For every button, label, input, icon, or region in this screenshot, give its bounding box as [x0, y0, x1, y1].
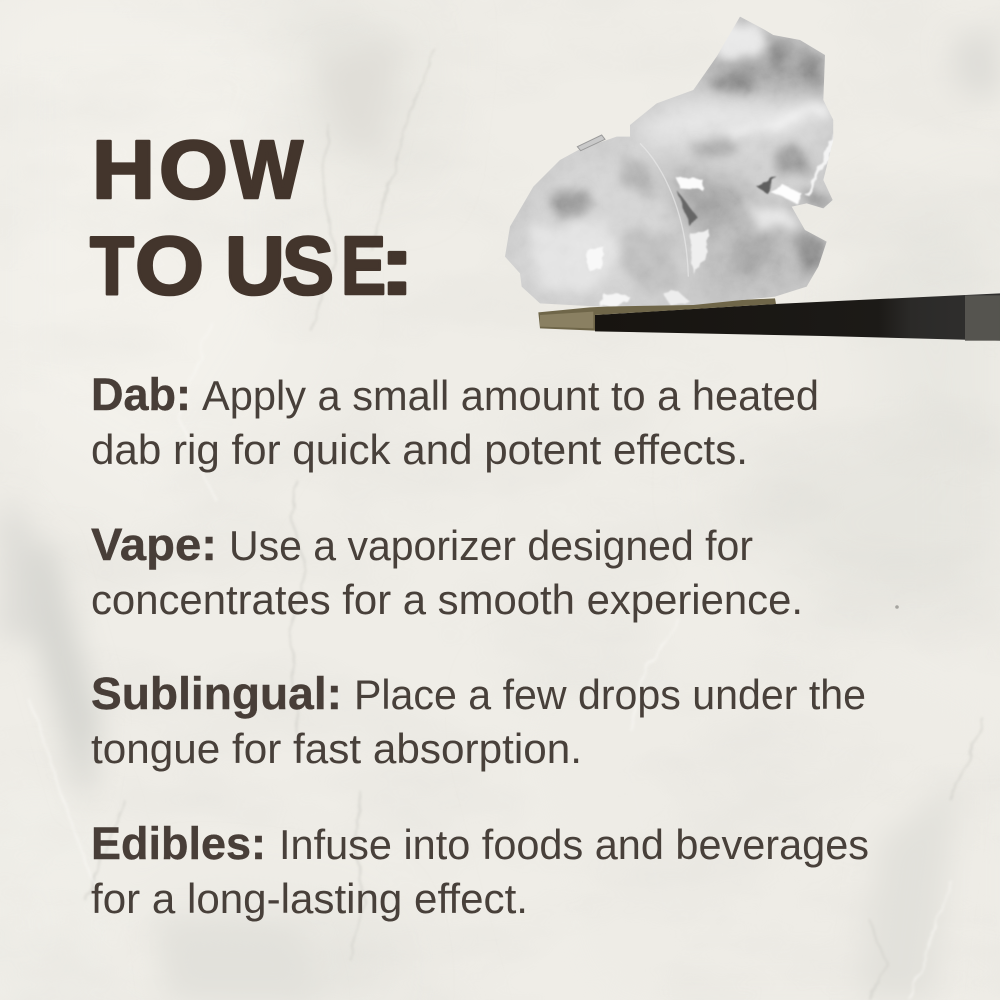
- text block: Vape: Vape:: [91, 519, 217, 570]
- title: HOW TO USE: S: [282, 219, 334, 312]
- title: HOW TO USE: T: [90, 219, 134, 312]
- text block: Sublingual: [91, 668, 866, 772]
- title: HOW TO USE: E: [341, 219, 386, 312]
- title: HOW TO USE: :: [379, 219, 415, 312]
- text block: Dab: dab rig for quick and potent effects.: [91, 426, 748, 473]
- title: HOW TO USE: O: [135, 219, 204, 312]
- text block: Dab: Dab:: [91, 369, 191, 420]
- icon: dab tool stick: [538, 293, 1000, 341]
- text block: Edibles: Infuse into foods and beverages: [279, 821, 869, 868]
- photo: crystal concentrate on dab tool: [490, 0, 1000, 341]
- text block: Vape: [91, 519, 803, 623]
- text block: Dab: Apply a small amount to a heated: [202, 372, 819, 419]
- title: HOW TO USE: [90, 123, 415, 312]
- text block: Sublingual: tongue for fast absorption.: [91, 725, 582, 772]
- title: HOW TO USE: W: [231, 123, 304, 216]
- text block: Vape: Use a vaporizer designed for: [229, 522, 753, 569]
- text block: Edibles: Edibles:: [91, 818, 266, 869]
- title: HOW TO USE: O: [159, 123, 228, 216]
- text block: Edibles: [91, 818, 869, 922]
- text block: Edibles: for a long-lasting effect.: [91, 875, 528, 922]
- speck on paper: [895, 605, 899, 609]
- title: HOW TO USE: U: [225, 219, 285, 312]
- icon: crystal rock: [505, 16, 834, 306]
- text block: Dab: [91, 369, 819, 473]
- text block: Sublingual: Place a few drops under the: [354, 671, 866, 718]
- title: HOW TO USE: H: [92, 123, 155, 216]
- text block: Vape: concentrates for a smooth experience.: [91, 576, 803, 623]
- text block: Sublingual: Sublingual:: [91, 668, 342, 719]
